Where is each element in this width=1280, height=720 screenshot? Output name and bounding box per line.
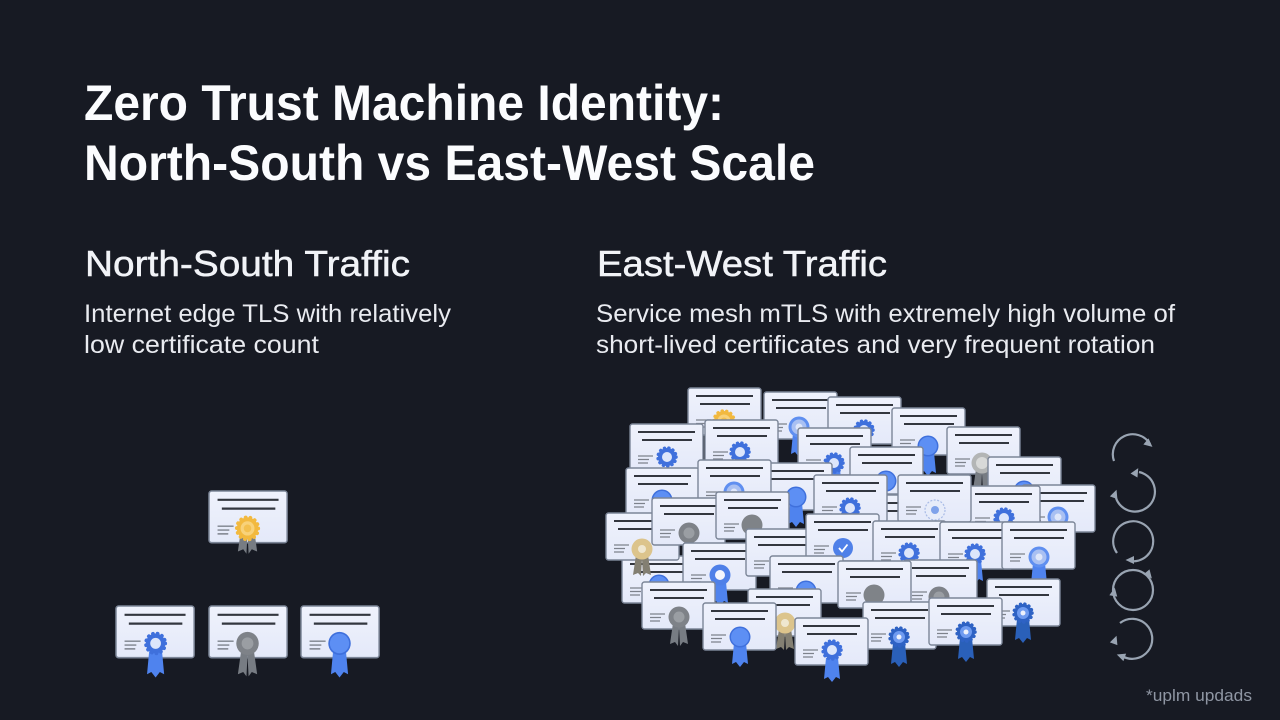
certificate 14 <box>626 468 699 515</box>
certificate 16 <box>814 475 887 522</box>
certificate 24 <box>746 529 819 576</box>
certificate 8 <box>705 420 778 467</box>
text: east-west description: Service mesh mTLS with extremely high volume of <box>596 300 1175 328</box>
text: north-south description: Internet edge TLS with relatively <box>84 300 452 328</box>
certificate 32 <box>748 589 821 650</box>
text: north-south description <box>84 300 452 359</box>
north-south certificates <box>116 491 379 678</box>
certificate 1 <box>688 388 761 435</box>
certificate 34 <box>703 603 776 667</box>
certificate 6 <box>798 428 871 493</box>
footnote: *uplm updads <box>1146 686 1252 705</box>
certificate 9 <box>630 424 703 471</box>
certificate 38 <box>795 618 868 682</box>
certificate 20 <box>606 513 679 576</box>
icon: rotation arrow 1 <box>1113 434 1155 461</box>
title: Zero Trust Machine Identity: <box>84 75 724 131</box>
heading: north-south traffic: North-South Traffic <box>85 243 410 284</box>
certificate 4 <box>892 408 965 476</box>
certificate 22 <box>716 492 789 539</box>
east-west certificate cluster <box>606 388 1095 682</box>
certificate 15 <box>698 460 771 507</box>
icon: rotation arrow 3 <box>1113 521 1153 564</box>
certificate 31 <box>838 561 911 608</box>
certificate 29 <box>770 556 843 603</box>
certificate 26 <box>873 521 946 568</box>
icon: rotation arrow 5 <box>1110 619 1152 661</box>
title <box>84 75 815 191</box>
certificate 33 <box>642 582 715 646</box>
text: east-west description <box>596 300 1175 359</box>
certificate 23 <box>683 543 756 606</box>
certificate 21 <box>652 498 725 545</box>
certificate: grey seal <box>209 606 287 676</box>
certificate 2 <box>764 392 837 457</box>
certificate 17 <box>967 486 1040 533</box>
rotation icons <box>1109 434 1155 661</box>
certificate 37 <box>929 598 1002 662</box>
icon: rotation arrow 2 <box>1110 466 1155 512</box>
certificate 10 <box>988 457 1061 504</box>
certificate 27 <box>940 522 1013 584</box>
certificate 35 <box>987 579 1060 643</box>
certificate 18 <box>898 475 971 522</box>
certificate: blue rosette <box>116 606 194 678</box>
certificate 36 <box>863 602 936 667</box>
certificate 11 <box>1022 485 1095 532</box>
certificate 13 <box>845 495 918 542</box>
certificate 25 <box>806 514 879 561</box>
certificate 7 <box>850 447 923 494</box>
certificate 19 <box>622 556 695 603</box>
certificate: blue seal <box>301 606 379 678</box>
certificate: gold seal <box>209 491 287 554</box>
certificate 28 <box>1002 522 1075 587</box>
certificate 3 <box>828 397 901 444</box>
certificate 12 <box>759 463 832 527</box>
text: north-south description: low certificate count <box>84 331 319 359</box>
icon: rotation arrow 4 <box>1109 569 1155 610</box>
text: east-west description: short-lived certificates and very frequent rotation <box>596 331 1155 359</box>
title: North-South vs East-West Scale <box>84 135 815 191</box>
certificate 5 <box>947 427 1020 492</box>
certificate 30 <box>904 560 977 608</box>
heading: east-west traffic: East-West Traffic <box>597 243 887 284</box>
